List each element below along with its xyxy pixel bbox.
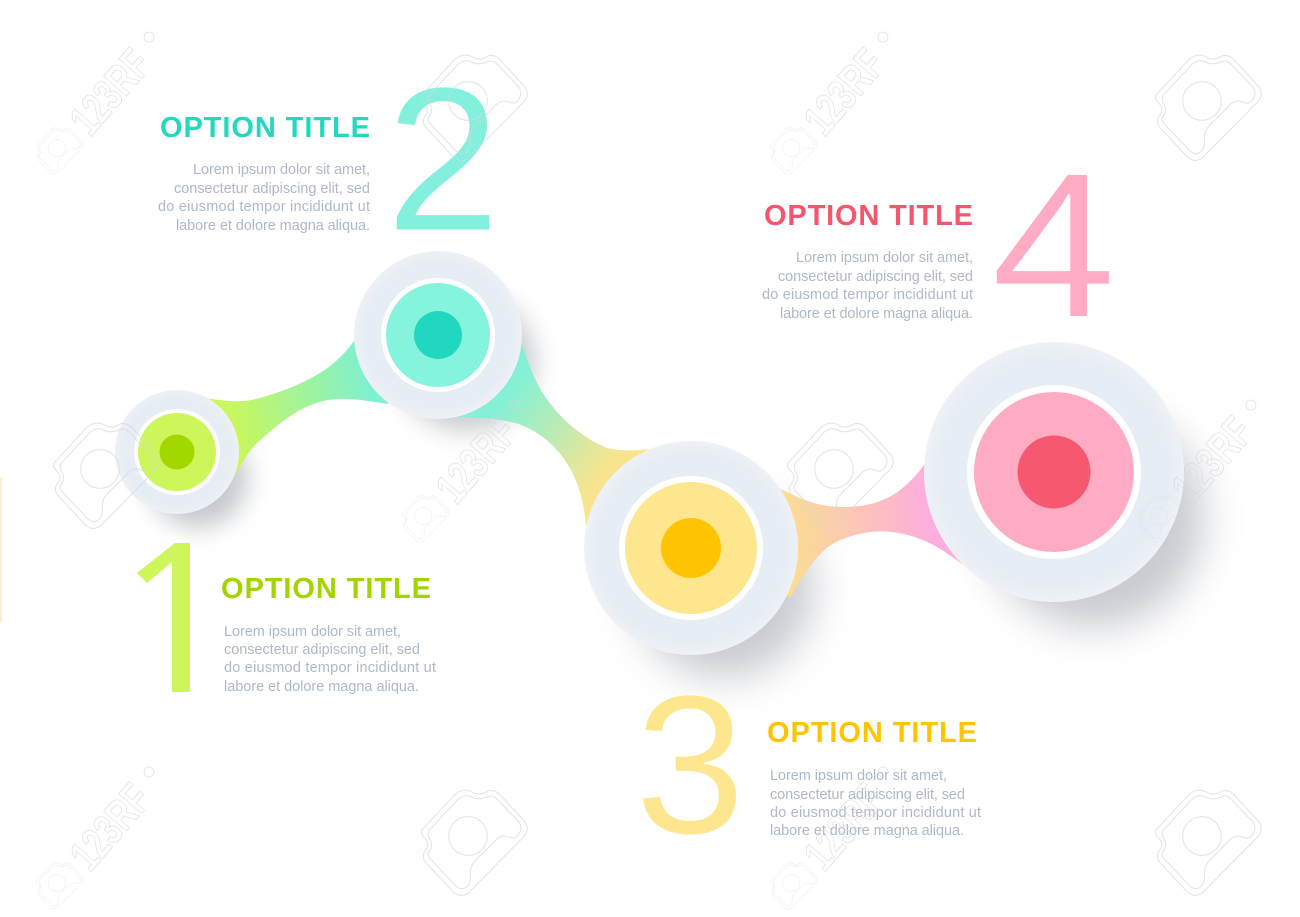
text block: option 2: Lorem ipsum dolor sit amet, xyxy=(193,162,370,178)
node 2 xyxy=(354,251,522,419)
text block: option 1: Lorem ipsum dolor sit amet, xyxy=(224,624,401,640)
watermark: logo top middle xyxy=(770,32,895,174)
text block: option 3: do eiusmod tempor incididunt ut xyxy=(770,805,981,821)
watermark: logo centre left xyxy=(402,400,527,542)
number 1 xyxy=(137,543,190,692)
text block: option 3: consectetur adipiscing elit, sed xyxy=(770,787,965,803)
number 3: 3 xyxy=(635,654,745,875)
node 1 xyxy=(115,390,239,514)
watermark: egg centre right xyxy=(787,423,893,528)
text block: option 1: labore et dolore magna aliqua. xyxy=(224,679,419,695)
node 4 xyxy=(924,342,1184,602)
text block: option 1: OPTION TITLE xyxy=(221,573,431,605)
number 2: 2 xyxy=(386,45,500,274)
watermark: logo top left xyxy=(36,32,161,174)
watermark: egg top right xyxy=(1155,55,1261,160)
watermark: logo bottom middle: 123RF xyxy=(795,775,895,880)
node 3 xyxy=(584,441,798,655)
watermark: logo centre right xyxy=(1138,400,1263,542)
text block: option 1: consectetur adipiscing elit, sed xyxy=(224,642,420,658)
circle shadows xyxy=(148,292,1204,678)
watermark: logo bottom left: 123RF xyxy=(61,775,161,880)
text block: option 4: labore et dolore magna aliqua. xyxy=(780,306,973,322)
number 4: 4 xyxy=(990,130,1117,362)
watermark: egg bottom right xyxy=(1155,790,1261,895)
text block: option 3: labore et dolore magna aliqua. xyxy=(770,823,964,839)
text block: option 2: consectetur adipiscing elit, sed xyxy=(174,181,370,197)
watermark: logo centre right: 123RF xyxy=(1163,408,1263,513)
watermark: egg top centre xyxy=(421,55,527,160)
text block: option 3: OPTION TITLE xyxy=(767,717,977,749)
text block: option 2: do eiusmod tempor incididunt ut xyxy=(158,199,370,215)
text block: option 2 xyxy=(158,112,370,234)
text block: option 2: OPTION TITLE xyxy=(160,112,370,144)
connector: step 1 to 2 xyxy=(190,338,420,480)
connector: step 3 to 4 xyxy=(740,462,980,598)
watermark: logo top middle: 123RF xyxy=(795,40,895,145)
text block: option 4: OPTION TITLE xyxy=(764,200,973,232)
number 1: 1 xyxy=(118,500,236,737)
watermark: egg centre left xyxy=(53,423,159,528)
left edge mark xyxy=(0,477,2,623)
text block: option 3 xyxy=(767,717,981,839)
text block: option 4: consectetur adipiscing elit, sed xyxy=(778,269,973,285)
watermark: logo top left: 123RF xyxy=(61,40,161,145)
connector: step 2 to 3 xyxy=(457,330,700,525)
text block: option 1: do eiusmod tempor incididunt ut xyxy=(224,660,436,676)
text block: option 4 xyxy=(762,200,973,322)
watermark: logo centre left: 123RF xyxy=(427,408,527,513)
text block: option 1 xyxy=(221,573,436,695)
watermark: egg bottom centre xyxy=(421,790,527,895)
watermark: logo bottom middle xyxy=(770,767,895,909)
watermark: logo bottom left xyxy=(36,767,161,909)
text block: option 4: do eiusmod tempor incididunt ut xyxy=(762,287,973,303)
text block: option 2: labore et dolore magna aliqua. xyxy=(176,218,370,234)
text block: option 3: Lorem ipsum dolor sit amet, xyxy=(770,768,947,784)
text block: option 4: Lorem ipsum dolor sit amet, xyxy=(796,250,973,266)
